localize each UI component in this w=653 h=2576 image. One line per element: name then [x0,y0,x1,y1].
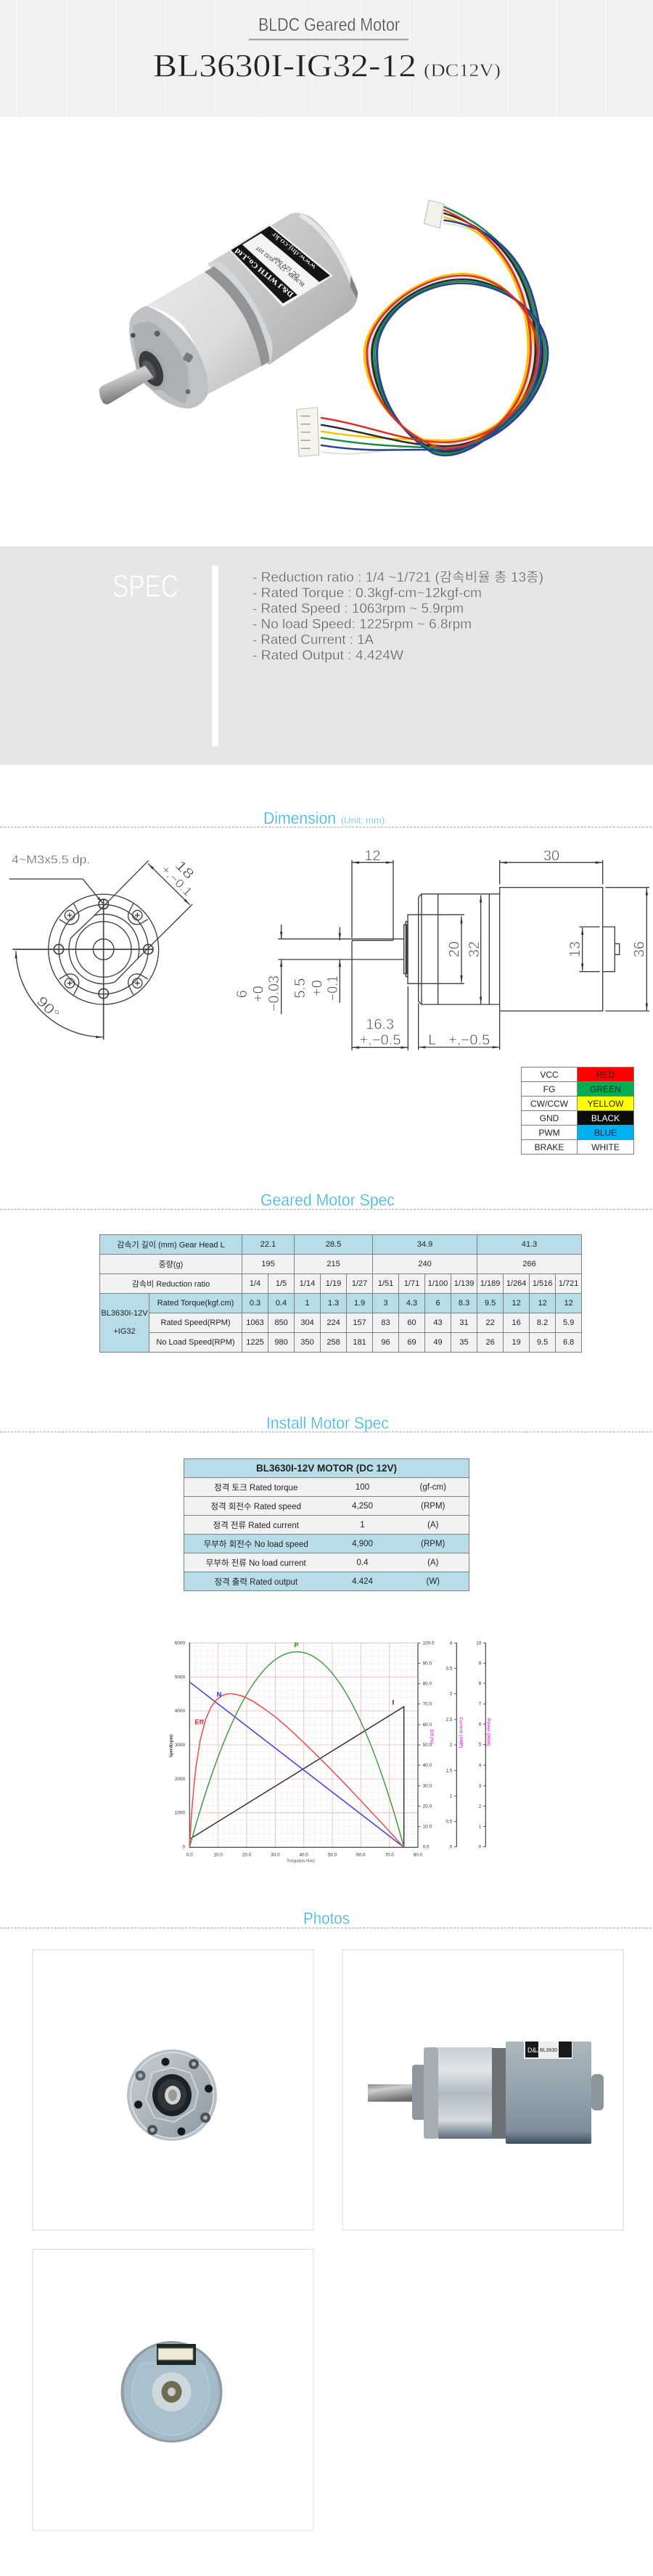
table: geared motor spec: 12 [564,1299,573,1308]
table: geared motor spec: 1/14 [300,1279,315,1288]
motor label: BL3630I - 12V + IG32 10T [255,244,305,287]
dimension text: +,−0.5 [448,1033,490,1049]
spec list: - Rated Current : 1A [252,632,374,647]
table: install motor spec: 정격 출력 Rated output [214,1578,297,1587]
header band [0,0,653,117]
table: install motor spec: 1 [360,1520,365,1529]
dimension text: 12 [364,849,380,864]
motor side label: BL3630 [540,2048,557,2053]
table: geared motor spec: 31 [459,1318,469,1327]
table: geared motor spec: 1 [305,1299,310,1308]
tick labels: 0.0 [423,1845,430,1850]
dimension text: 90° [33,994,62,1023]
table: install motor spec: 0.4 [357,1558,369,1566]
table: geared motor spec: 1/5 [276,1279,287,1288]
tick labels: 1 [450,1794,453,1799]
table: wire colour legend: BLUE [594,1127,617,1137]
heading: Install Motor Spec: Install Motor Spec [266,1413,389,1432]
spec list: - No load Speed: 1225rpm ~ 6.8rpm [252,616,472,631]
hero photo: geared motor [99,212,358,408]
table: geared motor spec: 1.9 [354,1299,365,1308]
table: geared motor spec: 1/721 [559,1279,578,1288]
table: geared motor spec: Rated Speed(RPM) [161,1318,231,1327]
motor side [368,2042,604,2144]
dimension lines [282,860,649,1050]
table: geared motor spec: 9.5 [537,1338,548,1347]
axis titles: Current (AMP) [458,1717,463,1748]
table: geared motor spec: 1/264 [506,1279,526,1288]
table: geared motor spec: 1/19 [326,1279,341,1288]
dimension text: 36 [632,941,648,957]
spec list: - Rated Output : 4.424W [252,648,403,663]
tick labels: 3 [479,1783,482,1788]
tick labels: 20.0 [423,1804,432,1809]
curve labels: P [294,1642,299,1649]
tick labels: 4 [450,1640,453,1646]
table: geared motor spec: 26 [485,1338,495,1347]
table: geared motor spec: 60 [407,1318,416,1327]
table: geared motor spec: +IG32 [113,1327,136,1336]
dimension text: 32 [467,941,482,957]
product title: (DC12V) [424,61,501,80]
tick labels: 3 [450,1692,453,1697]
curve: current [189,1706,404,1847]
tick labels: 40.0 [423,1763,432,1768]
table: install motor spec: 정격 토크 Rated torque [214,1484,297,1493]
table: wire colour legend: GREEN [590,1083,621,1094]
table: install motor spec: (RPM) [421,1501,445,1510]
table: geared motor spec: 감속기 길이 (mm) Gear Head L [117,1241,225,1250]
tick labels: 3.5 [446,1666,453,1671]
dimension lines [9,879,103,904]
tick labels: 2.5 [446,1717,453,1722]
tick labels: 50.0 [328,1852,337,1857]
tick labels: 0 [479,1845,482,1850]
table: install motor spec: 4,900 [352,1539,373,1548]
tick labels: 5 [479,1743,482,1748]
tick labels: 40.0 [300,1852,308,1857]
spec list: - Rated Torque : 0.3kgf-cm~12kgf-cm [252,586,482,600]
motor label: DC 12V 06P [273,255,301,278]
mounting holes [54,899,153,999]
table: geared motor spec: 850 [274,1318,288,1327]
table: wire colour legend: BRAKE [535,1142,564,1152]
table: geared motor spec: 224 [326,1318,340,1327]
motor rear [120,2341,222,2443]
table: wire colour legend: WHITE [591,1142,620,1152]
table: geared motor spec: 감속비 Reduction ratio [132,1280,210,1289]
table: install motor spec: 무부하 회전수 No load speed [204,1540,308,1549]
motor front [127,2049,217,2141]
table: install motor spec: (RPM) [421,1539,445,1548]
tick labels: 30.0 [271,1852,280,1857]
table: wire colour legend: RED [596,1069,615,1079]
table: geared motor spec: 0.4 [276,1299,287,1308]
panel: photo rear view [33,2250,313,2530]
tick labels: 7 [479,1702,482,1707]
tick labels: 0 [450,1845,453,1850]
table: geared motor spec: 350 [300,1338,314,1347]
dimension text [234,849,648,1049]
table: wire colour legend: YELLOW [587,1098,624,1108]
table: geared motor spec: 16 [512,1318,521,1327]
table: install motor spec: 4,250 [352,1501,373,1510]
spec list: - Rated Speed : 1063rpm ~ 5.9rpm [252,601,464,616]
table: geared motor spec: 1/516 [533,1279,552,1288]
dimension text: +0 [250,986,266,1002]
tick labels: 10.0 [423,1825,432,1830]
tick labels: 60.0 [356,1852,366,1857]
dimension text: +,−0.5 [359,1033,401,1049]
tick labels: 1.5 [446,1768,453,1773]
tick labels: 1 [479,1824,482,1829]
dimension text: 20 [446,941,462,957]
table: geared motor spec: Rated Torque(kgf.cm) [157,1299,234,1308]
table: geared motor spec: 1/71 [404,1279,419,1288]
spec list [252,570,543,663]
table: install motor spec: 4.424 [352,1577,373,1585]
table: geared motor spec: 35 [459,1338,469,1347]
table: geared motor spec: 240 [418,1260,432,1268]
table: geared motor spec: 1/51 [378,1279,393,1288]
tick labels: 4 [479,1763,482,1768]
tick labels: 0 [182,1845,185,1850]
table: geared motor spec: 1/189 [480,1279,500,1288]
tick labels: 0.0 [186,1852,193,1857]
table: install motor spec: BL3630I-12V MOTOR (DC 12V) [256,1463,397,1474]
dimension text: +0 [309,980,325,996]
tick labels: 90.0 [423,1661,432,1666]
tick labels: 6 [479,1722,482,1727]
tick labels: 70.0 [385,1852,394,1857]
table: geared motor spec: 4.3 [406,1299,417,1308]
curve labels: N [217,1690,222,1698]
table: geared motor spec: 1.3 [328,1299,339,1308]
connector bottom [297,408,319,456]
motor side label [524,2042,572,2059]
tick labels: 70.0 [423,1702,432,1707]
panel: photo side view [342,1949,623,2230]
table: geared motor spec: 22 [485,1318,495,1327]
tick labels: 80.0 [414,1852,423,1857]
dimension text: 6 [234,990,250,998]
tick labels: 4000 [175,1709,185,1714]
table: geared motor spec: 19 [512,1338,521,1347]
table: wire colour legend: PWM [538,1127,560,1137]
axis titles: Eff (%) [429,1730,434,1744]
tick labels: 1000 [175,1811,185,1816]
table: geared motor spec: 5.9 [563,1318,574,1327]
table: geared motor spec: 6 [435,1299,440,1308]
drawing: side view [234,849,649,1050]
tick labels: 6000 [175,1640,185,1646]
table: install motor spec: (gf-cm) [420,1482,446,1491]
table: geared motor spec: 157 [353,1318,366,1327]
table: geared motor spec: 1/139 [454,1279,474,1288]
heading: Dimension: (Unit: mm) [341,815,385,825]
curve labels: Eff [194,1718,205,1725]
table: geared motor spec: 83 [381,1318,390,1327]
axis titles: Power (Watt) [486,1718,491,1746]
table: install motor spec: 정격 회전수 Rated speed [210,1503,301,1511]
dimension text: 5.5 [292,978,308,999]
curve labels: I [393,1699,394,1706]
table: install motor spec: 정격 전류 Rated current [213,1522,299,1530]
tick labels: 80.0 [423,1682,432,1687]
table: geared motor spec: 8.2 [537,1318,548,1327]
dimension text: −0.1 [325,975,341,1001]
table: geared motor spec: 266 [522,1260,536,1268]
table: install motor spec [184,1458,469,1591]
motor label: www.dnj.co.kr [270,230,318,271]
table: geared motor spec: 0.3 [250,1299,260,1308]
table: geared motor spec: 9.5 [485,1299,496,1308]
table: geared motor spec: 중량(g) [159,1260,183,1269]
curve: efficiency [189,1693,403,1847]
table: geared motor spec: 195 [261,1260,275,1268]
panel: photo front face [33,1949,313,2230]
axis titles: Speed(rpm) [168,1734,173,1757]
table: geared motor spec: 1063 [246,1318,264,1327]
heading: Dimension [263,809,385,827]
product title [153,48,501,83]
dimension text: 16.3 [366,1017,394,1033]
dimension text: 4~M3x5.5 dp. [12,854,90,867]
table: geared motor spec: 22.1 [260,1240,276,1249]
table: install motor spec: (W) [427,1577,440,1585]
table: geared motor spec [99,1234,582,1353]
screws [59,904,148,995]
table: geared motor spec: 215 [326,1260,340,1268]
table: geared motor spec: No Load Speed(RPM) [156,1338,235,1347]
curve: power [189,1652,404,1847]
tick labels: 10 [476,1640,482,1646]
dimension text: 18 [172,858,197,883]
spec list: - Reduction ratio : 1/4 ~1/721 (감속비율 총 13종) [252,570,543,585]
dimension text: 30 [543,849,559,864]
table: geared motor spec: 980 [274,1338,288,1347]
SPEC heading: SPEC [112,569,178,604]
tick labels: 8 [479,1681,482,1686]
table: geared motor spec: 28.5 [326,1240,341,1249]
axis titles [168,1717,491,1864]
tick labels: 20.0 [242,1852,252,1857]
curve: speed [189,1682,403,1847]
table: geared motor spec: 304 [300,1318,314,1327]
table: geared motor spec: 6.8 [563,1338,574,1347]
hero photo: wire harness [297,200,548,456]
tick labels: 2 [450,1743,453,1748]
motor label [229,224,332,307]
table: geared motor spec: 181 [353,1338,366,1347]
tick labels: 100.0 [423,1640,435,1646]
tick labels: 60.0 [423,1722,432,1727]
tick labels: 2 [479,1804,482,1809]
table: wire colour legend: CW/CCW [530,1098,568,1108]
table: geared motor spec: 1/4 [250,1279,260,1288]
motor side label: D&J [527,2047,540,2054]
panel: SPEC band [0,546,653,765]
table: geared motor spec: 258 [326,1338,340,1347]
table: geared motor spec: 12 [538,1299,547,1308]
axis titles: Torque(m-Nm) [287,1859,315,1864]
tick labels: 0.5 [446,1820,453,1825]
dimension text: −0.03 [266,975,282,1012]
tick labels: 3000 [175,1743,185,1748]
connector top [424,200,444,228]
curve labels [194,1642,394,1725]
table: wire colour legend: GND [540,1112,559,1123]
table: geared motor spec: 12 [512,1299,521,1308]
table: wire colour legend [521,1067,634,1155]
subtitle: BLDC Geared Motor [258,15,400,35]
dimension text: L [428,1033,436,1049]
drawing: front view [9,854,197,1039]
product title: BL3630I-IG32-12 [153,48,416,83]
tick labels: 5000 [175,1675,185,1680]
table: geared motor spec: BL3630I-12V [101,1309,148,1318]
table: geared motor spec: 1/100 [428,1279,448,1288]
table: geared motor spec: 34.9 [417,1240,432,1249]
table: geared motor spec: 3 [383,1299,388,1308]
table: install motor spec: (A) [427,1520,438,1529]
table: geared motor spec: 96 [381,1338,390,1347]
table: install motor spec: 무부하 전류 No load current [206,1559,306,1568]
table: geared motor spec: 41.3 [522,1240,537,1249]
table: geared motor spec: 69 [407,1338,416,1347]
chart: motor performance curves [168,1640,491,1864]
table: geared motor spec: 1/27 [352,1279,367,1288]
tick labels: 2000 [175,1777,185,1782]
tick labels [175,1640,482,1857]
table: geared motor spec: 43 [433,1318,443,1327]
table: geared motor spec: 49 [433,1338,443,1347]
motor label: D&J WITH Co.,Ltd [234,247,295,298]
table: wire colour legend: VCC [540,1069,559,1079]
heading: Geared Motor Spec: Geared Motor Spec [260,1191,395,1210]
table: wire colour legend: BLACK [591,1112,620,1123]
table: geared motor spec: 8.3 [459,1299,469,1308]
tick labels: 9 [479,1661,482,1666]
tick labels: 30.0 [423,1783,432,1788]
dimension text [12,854,197,1023]
dimension text: +,−0.1 [159,862,194,899]
table: install motor spec: 100 [356,1482,369,1491]
heading: Dimension: Dimension [263,809,336,827]
table: wire colour legend: FG [543,1083,555,1094]
tick labels: 10.0 [214,1852,223,1857]
table: geared motor spec: 1225 [246,1338,264,1347]
table: install motor spec: (A) [427,1558,438,1566]
tick labels: 50.0 [423,1743,432,1748]
dimension text: 13 [567,941,583,957]
heading: Photos: Photos [303,1909,350,1928]
